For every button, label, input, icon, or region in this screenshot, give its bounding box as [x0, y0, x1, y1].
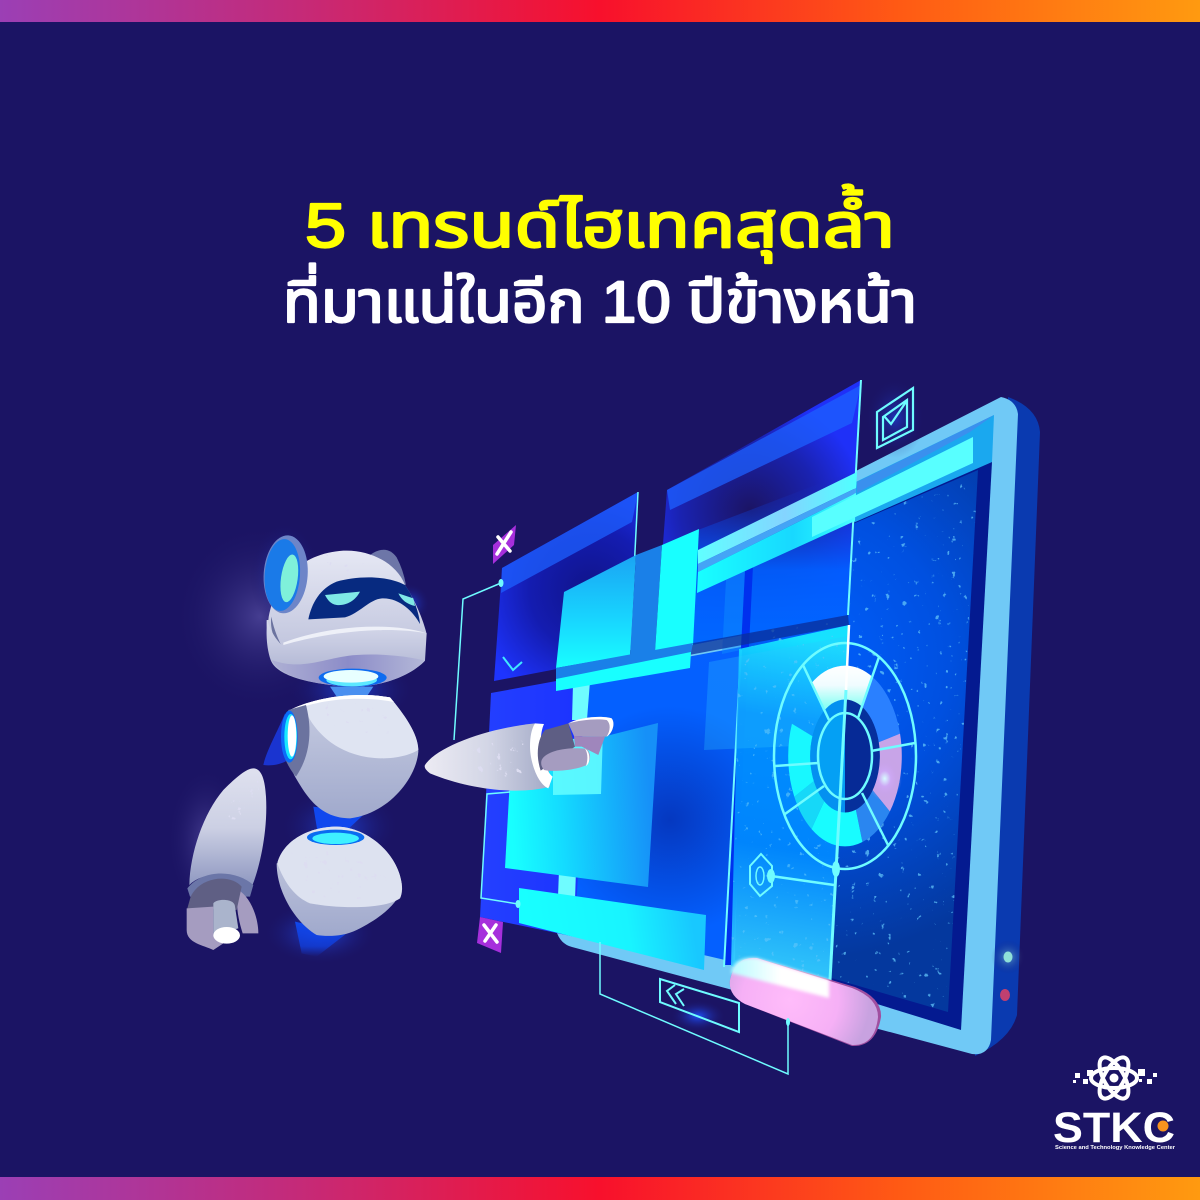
index finger: [568, 717, 613, 737]
monitor frame: [556, 397, 1018, 1054]
gauge dot: [832, 861, 840, 877]
light overlay block: [553, 730, 603, 795]
robot glows: [250, 522, 430, 965]
blue shoulder cone: [263, 713, 294, 765]
lower bar: [556, 652, 691, 691]
divider strip: [724, 566, 753, 965]
inner disc left: [818, 713, 845, 799]
panel body: [494, 492, 638, 681]
wire dot: [786, 1018, 790, 1026]
title line 2: ที่มาแน่ในอีก 10 ปีข้างหน้า: [283, 263, 917, 335]
white cuff: [530, 723, 553, 788]
badge x: [497, 532, 511, 554]
shoulder socket white: [288, 715, 296, 757]
monitor illustration: [556, 397, 1040, 1056]
large gradient block: [505, 723, 658, 887]
hip light blue ring: [307, 830, 364, 845]
hexagon: [750, 854, 772, 896]
hip: [277, 827, 402, 936]
check glow: [865, 378, 925, 458]
pill edge: [730, 958, 881, 1046]
fingers: [187, 907, 223, 950]
icon: back arrows box: [660, 979, 739, 1032]
hex dot: [767, 869, 775, 883]
eye left: [325, 592, 360, 605]
thumb: [237, 890, 258, 933]
lower right glass panel: [704, 625, 849, 998]
wire: lower left: [481, 792, 518, 904]
thumb edge: [585, 749, 589, 766]
right block: [655, 529, 699, 652]
arm speckle: [467, 738, 523, 778]
panel top band: [667, 385, 861, 510]
hip speckle: [290, 847, 393, 900]
under finger: [574, 736, 605, 755]
title line 1: 5 เทรนด์ไฮเทคสุดล้ำ: [305, 184, 895, 263]
head halo: [173, 523, 347, 710]
torso upper: [290, 695, 418, 758]
logo subtitle: Science and Technology Knowledge Center: [1055, 1145, 1176, 1151]
connector: [771, 876, 834, 885]
robot: [167, 522, 613, 965]
shoulder band: [283, 705, 309, 777]
vertical glass divider: [722, 566, 753, 967]
lower left glass panel: [480, 647, 741, 970]
thrust cones: [295, 687, 373, 957]
screen dark edge: [735, 462, 992, 1030]
side shadow: [271, 617, 282, 646]
strip bright: [812, 437, 973, 537]
panel body: [655, 380, 861, 652]
icon: checkbox: [865, 378, 925, 458]
pink centre highlight: [868, 756, 902, 801]
pixel squares: [1073, 1069, 1157, 1084]
header shading: [857, 415, 994, 493]
left block: [556, 555, 636, 668]
visor glow: [390, 583, 430, 623]
middle finger: [213, 900, 238, 937]
cuff: [187, 874, 253, 897]
radial gauge: [774, 643, 916, 869]
cyan header strips: [697, 437, 973, 593]
title: [283, 184, 917, 335]
icon: chevron down: [503, 657, 522, 670]
arm: [189, 768, 266, 887]
shoulder socket cyan: [284, 714, 297, 759]
panel lower light: [655, 470, 855, 652]
monitor back edge: [975, 397, 1040, 1056]
glass fill: [731, 625, 849, 998]
outer ring: [774, 643, 916, 869]
centre glass: [575, 647, 741, 960]
forearm: [425, 723, 550, 791]
top gradient bar: [0, 0, 1200, 22]
LED glow: [991, 940, 1025, 974]
eye right: [398, 593, 415, 606]
monitor header strip: [697, 415, 994, 596]
head speckle: [310, 554, 402, 580]
top cyan panel: [556, 529, 699, 691]
badge shape: [477, 917, 503, 953]
wrist: [187, 879, 242, 910]
head lower: [267, 620, 427, 687]
glass front edge line: [829, 625, 849, 998]
panel right edge: [848, 380, 861, 615]
wire dot upper: [498, 579, 504, 587]
LED dot: [1004, 952, 1012, 962]
head: [261, 534, 427, 687]
hip light: [277, 827, 402, 907]
chevrons: [667, 985, 676, 1004]
lower connector: [558, 870, 576, 900]
ear disc: [262, 538, 302, 612]
ear light: [278, 553, 301, 603]
glow under back icon: [670, 1000, 726, 1032]
wire: upper left: [454, 583, 501, 740]
hip shape: [277, 827, 402, 936]
arm speckle: [220, 780, 260, 827]
neck light: [319, 669, 387, 687]
glass speckles: [731, 625, 849, 998]
hip light core: [312, 833, 359, 844]
visor: [308, 577, 420, 624]
arm halo: [167, 767, 247, 913]
band: [556, 643, 693, 680]
brow highlight: [283, 627, 427, 645]
gap band between panel rows: [556, 615, 849, 680]
LED red: [1000, 989, 1010, 1001]
pill body: [730, 958, 878, 1045]
wire: bottom connector: [600, 942, 788, 1074]
right arm: [425, 717, 613, 791]
panel right edge: [630, 492, 638, 650]
badge: bottom close button: [477, 917, 503, 953]
hex centre: [756, 867, 764, 885]
icon: hexagon node: [750, 854, 840, 896]
strip stripe: [698, 488, 856, 572]
inner box: [883, 400, 907, 440]
finger tip: [213, 927, 240, 944]
thumb: [541, 748, 590, 771]
icon: second chevron: [676, 989, 684, 1006]
bottom cyan bar: [519, 888, 706, 970]
inner ring: [818, 713, 872, 799]
strip lower: [697, 493, 856, 593]
top right glass panel: [655, 380, 861, 652]
divider light strip: [722, 570, 745, 654]
torso: [263, 695, 418, 818]
gauge lines: [774, 643, 916, 869]
gauge fills: [799, 683, 902, 829]
left column: [480, 673, 600, 940]
spokes: [775, 657, 915, 845]
index edge: [568, 717, 613, 737]
logo wordmark: STKC: [1053, 1104, 1175, 1152]
LED cyan: [991, 940, 1025, 974]
outer box: [877, 388, 913, 448]
left arm: [187, 768, 266, 950]
shoulder socket blue: [281, 711, 298, 763]
ear back: [370, 550, 406, 585]
top left glass panel: [494, 492, 638, 681]
badge x: [484, 925, 497, 942]
inner disc right: [845, 713, 872, 799]
logo dot: [1158, 1120, 1168, 1132]
torso lower: [283, 695, 418, 818]
ring segments: [799, 683, 891, 829]
bottom gradient bar: [0, 1177, 1200, 1200]
torso speckle: [317, 700, 400, 733]
vertical connector: [572, 681, 590, 720]
atom mark: [1091, 1053, 1137, 1103]
divider line: [724, 650, 741, 967]
panel top band: [501, 492, 638, 593]
badge shape: [493, 525, 516, 564]
faint light block: [704, 636, 848, 750]
check mark: [884, 402, 906, 424]
bottom glow: [263, 902, 377, 965]
pink pill button: [730, 958, 881, 1046]
torso top highlight: [290, 695, 394, 712]
logo STKC: [1053, 1053, 1176, 1152]
ear glow: [250, 522, 320, 628]
cyan lower edge: [829, 690, 846, 998]
strip upper: [698, 472, 857, 564]
badge: top close button: [493, 525, 516, 564]
block between: [630, 545, 662, 655]
white upper edge: [846, 625, 849, 690]
head upper: [267, 551, 427, 647]
screen speckles: [735, 470, 978, 1012]
wire dot lower: [516, 900, 520, 908]
jaw underside: [272, 655, 425, 687]
inner ring dark: [845, 700, 880, 812]
pill glass highlight: [731, 958, 829, 998]
hand: [538, 723, 575, 771]
neck glow: [288, 657, 415, 723]
box: [660, 979, 739, 1032]
ear ring: [261, 534, 310, 615]
waist glow: [280, 787, 400, 867]
screen: [735, 470, 978, 1012]
inner ring light: [810, 700, 845, 812]
